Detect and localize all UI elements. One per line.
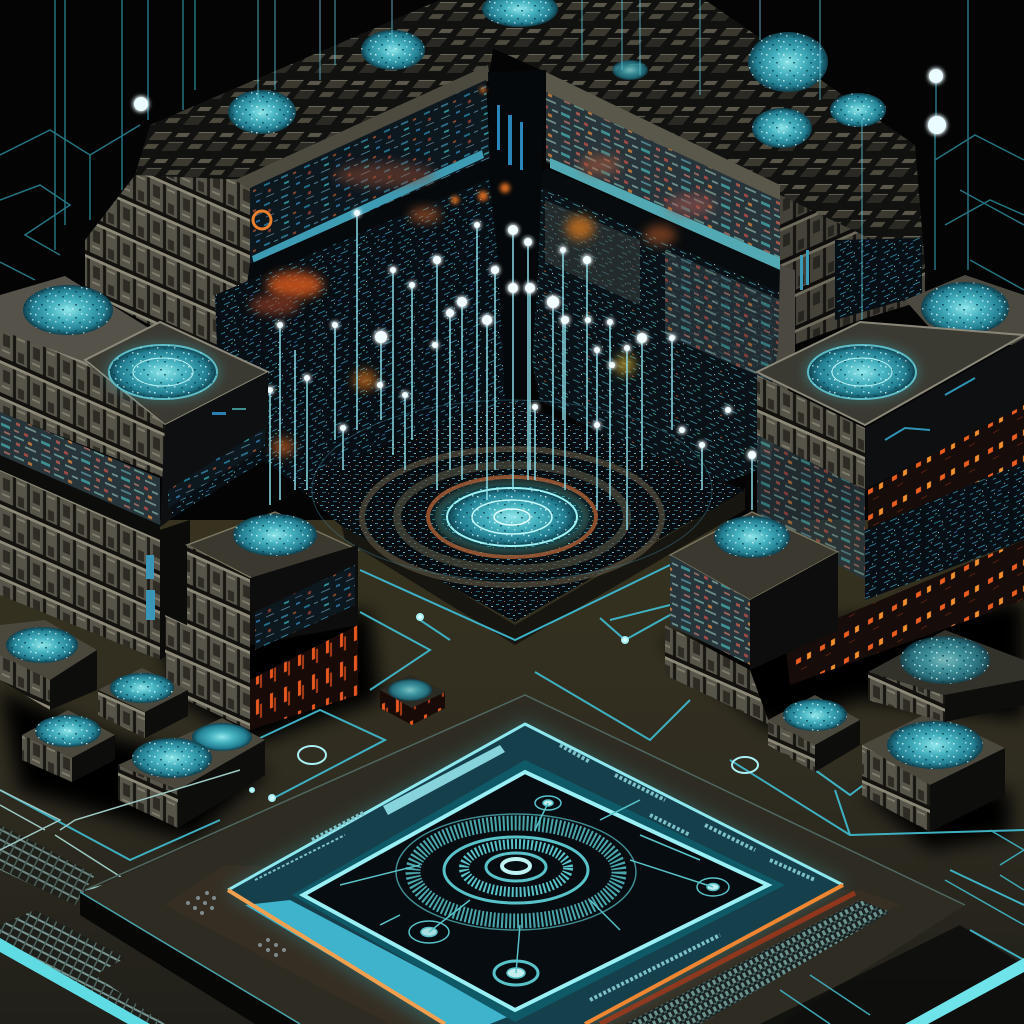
corner pillar lights: [497, 105, 523, 170]
panel base: [80, 695, 965, 1024]
right tower mid stone: [757, 435, 865, 580]
left tower screen band: [0, 412, 160, 530]
server 8: [868, 630, 1024, 722]
block node: [714, 516, 790, 558]
panel rim: [228, 724, 843, 1024]
middle right block: [665, 512, 838, 725]
block roof: [670, 512, 838, 600]
floor: [0, 520, 1024, 1024]
block right face: [750, 552, 838, 670]
left tower upper roof: [0, 276, 152, 366]
right tower: [757, 275, 1024, 685]
left tower: [0, 276, 268, 660]
roof node 4: [748, 32, 828, 92]
roof node 7: [612, 60, 648, 80]
left tower right face lights: [168, 408, 265, 518]
platform side: [340, 490, 745, 645]
block right face: [250, 545, 358, 645]
lower right dark floor: [760, 830, 1024, 1024]
server 3: [22, 710, 115, 782]
right tower upper roof: [905, 275, 1024, 345]
corner orange spots: [451, 87, 510, 204]
left circuit traces: [0, 0, 195, 280]
orange glow: [250, 163, 441, 456]
right wing roof: [440, 0, 925, 265]
panel orange edges: [228, 885, 855, 1024]
right tower lower red band: [785, 540, 1024, 685]
back building: left wing: [85, 0, 530, 480]
right wing dark channel: [530, 168, 780, 292]
panel keypads: [186, 891, 890, 1024]
block screen: [255, 565, 355, 650]
platform cyan edge: [360, 565, 670, 640]
top beacons: [134, 69, 946, 134]
right wing colored panel 2: [665, 250, 780, 385]
roof node 1: [228, 90, 296, 134]
panel outer tray: [165, 865, 900, 1024]
block base: [665, 625, 770, 725]
right tower roof: [757, 322, 1024, 425]
left wing upper screen: [250, 80, 490, 268]
left tower blue slots: [146, 555, 155, 620]
left wing cornice: [235, 65, 490, 190]
corner glowing strips: [0, 938, 1024, 1024]
panel base outline: [85, 695, 965, 905]
left tower roof: [85, 322, 268, 425]
circuit hatch lower: [0, 910, 165, 1024]
block roof: [187, 512, 358, 585]
platform top: [290, 400, 745, 622]
panel pale bar: [383, 745, 505, 815]
hanging lines over roof: [258, 0, 862, 320]
panel diagram: [340, 796, 729, 985]
panel black slab: [80, 892, 300, 1024]
right tower upper node: [921, 282, 1009, 334]
right wing cyan strip: [550, 158, 780, 270]
left wing lower screen: [215, 178, 530, 480]
left wing stepped stone: [85, 175, 250, 400]
block left face: [187, 545, 250, 680]
block base: [165, 615, 250, 730]
central platform: [290, 400, 745, 645]
right tower blue marks: [885, 378, 975, 440]
left tower base: [0, 470, 160, 660]
right wing cornice: [546, 72, 780, 205]
back building: right wing: [440, 0, 925, 490]
server 7: [862, 712, 1005, 832]
right wing pillar: [760, 265, 795, 460]
control panel: [80, 695, 965, 1024]
ground shadows: [0, 600, 1024, 850]
right circuit traces: [935, 0, 1024, 290]
right tower disc: [804, 342, 920, 402]
panel top highlight: [228, 724, 843, 890]
roof node 2: [361, 30, 425, 70]
left tower black rail: [0, 455, 160, 540]
right tower red band: [868, 405, 1024, 530]
left wing cyan strip: [252, 150, 484, 264]
panel bright strip: [245, 900, 510, 1024]
left tower base side: [160, 520, 190, 660]
lower left circuit field: [0, 770, 260, 1024]
block left face: [670, 555, 750, 665]
left tower stone face: [0, 330, 165, 478]
panel screen frame: [292, 760, 785, 1022]
right wing side screen: [835, 238, 922, 320]
corner pillar: [488, 70, 546, 400]
panel black slab line: [80, 892, 300, 1024]
middle left block: [165, 512, 358, 730]
circuit lines: [0, 770, 260, 905]
trace nodes: [250, 614, 758, 801]
right tower stone face: [757, 375, 865, 490]
right tower dark face: [865, 338, 1024, 490]
server 5: [380, 675, 445, 725]
right wing colored panel: [545, 200, 640, 305]
roof node 6: [830, 93, 886, 127]
left wing roof: [135, 0, 500, 180]
central disc: [434, 481, 590, 553]
circuit hatch upper: [0, 825, 95, 905]
right wing side stone: [780, 195, 925, 350]
right wing blue slots: [800, 250, 809, 290]
panel screen: [303, 772, 768, 1010]
server 6: [768, 695, 860, 772]
right wing upper screen: [546, 92, 780, 268]
right wing lower screen: [515, 180, 780, 490]
panel glow: [225, 722, 845, 1024]
roof node 5: [752, 108, 812, 148]
small servers: [0, 620, 1024, 832]
server 4: [118, 718, 265, 828]
roof glow nodes: [228, 0, 886, 148]
orange ring: [253, 211, 271, 229]
left tower disc: [105, 342, 221, 402]
floor circuit traces: [0, 600, 1024, 960]
left wing dark channel: [245, 158, 490, 296]
left tower stone right face: [160, 372, 268, 527]
block node: [233, 514, 317, 556]
right tower mid screen: [865, 462, 1024, 600]
left tower upper node: [23, 285, 113, 335]
platform rings: [312, 400, 712, 585]
roof node 3: [482, 0, 558, 27]
rising data lines: [270, 213, 752, 530]
data line beads: [267, 210, 756, 459]
right wing orange glow: [566, 155, 714, 375]
server 2: [98, 668, 188, 738]
server 1: [0, 620, 97, 710]
panel rim text marks: [255, 745, 815, 1000]
block red lights: [250, 625, 358, 730]
